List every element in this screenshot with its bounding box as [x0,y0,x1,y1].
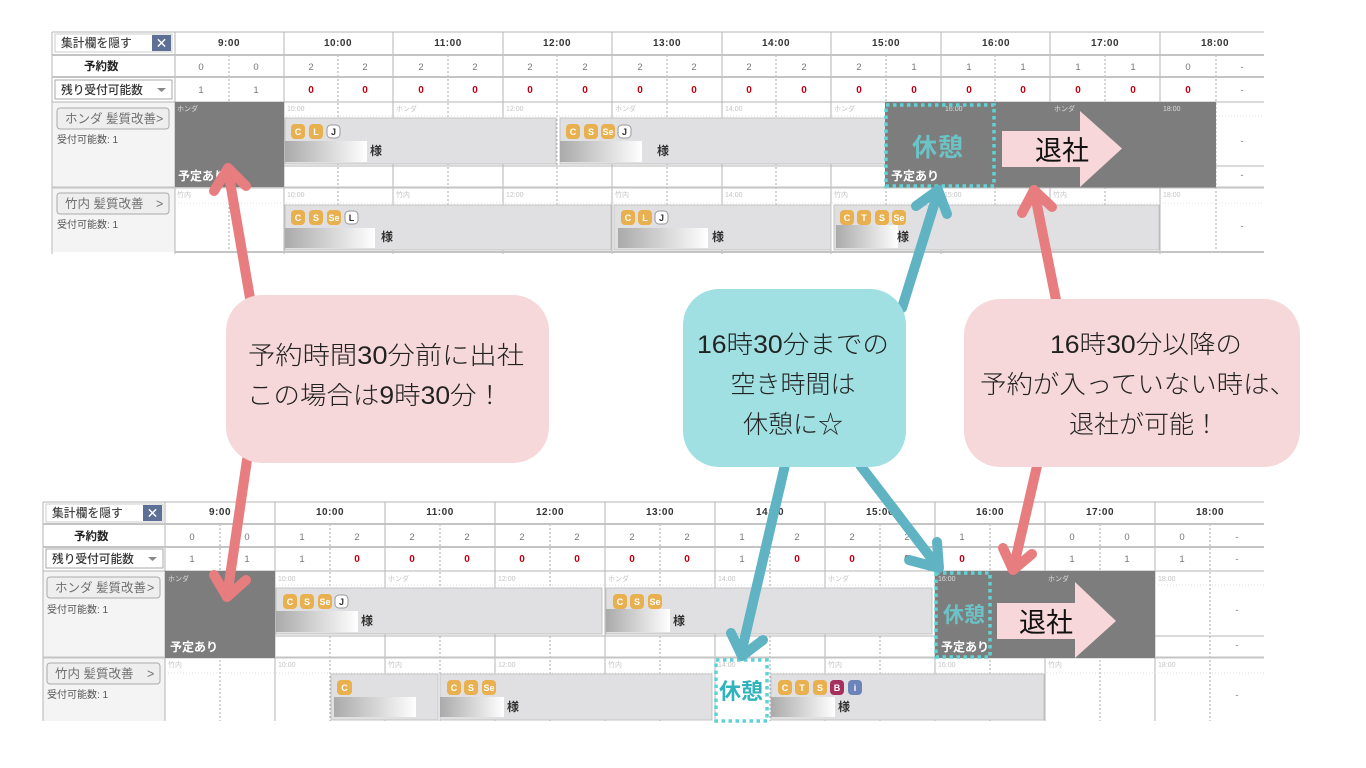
top table: time labels [177,104,1244,232]
top table: Honda reservation 13:00: S [588,127,594,137]
arrow: pink to bottom 9:00 block [214,460,247,597]
top table: remaining availability row: 0 [911,85,917,96]
top table: remaining availability row [55,80,1244,99]
top table: Takeuchi reservation 15:00: S [879,213,885,223]
top table: remaining availability row: - [1240,85,1244,96]
bottom table: hour headers: 16:00 [976,507,1004,518]
bottom table: remaining availability row: 0 [849,554,855,565]
bottom table: staff Honda label: > [147,581,154,595]
bottom table: remaining availability row: 0 [904,554,910,565]
bottom table: staff Takeuchi label: 受付可能数: 1 [47,688,109,701]
bottom table: reservation count row: 2 [574,532,580,543]
bottom table: reservation count row [74,529,1239,543]
bottom table: Takeuchi reservation 10:30: C [341,683,348,693]
bottom table: Honda reservation 10:00: C [287,597,294,607]
top table: Honda reservation 13:00: J [622,127,627,137]
bottom table: hide summary button [46,504,163,522]
callout: may leave if no bookings: 16時30分以降の [1050,331,1242,359]
callout: arrive 30 minutes before: 予約時間30分前に出社 [248,342,524,370]
top table: hour headers: 11:00 [434,38,462,49]
callout: may leave if no bookings [964,299,1300,467]
top table: leave arrow [1002,111,1122,187]
top table: reservation count row: 2 [527,62,533,73]
top table: reservation count row: 1 [1075,62,1081,73]
bottom table: time labels: - [1235,605,1239,616]
top table: remaining availability row: 0 [1020,85,1026,96]
bottom table: reservation count row: 0 [189,532,195,543]
bottom table: hour headers: 14:00 [756,507,784,518]
bottom table: time labels: ホンダ [388,574,409,583]
panel: top schedule table [52,32,1264,254]
top table: time labels: 14:00 [725,106,743,113]
top table: Takeuchi reservation 13:00: 様 [712,229,724,244]
top table: Takeuchi reservation 13:00: C [625,213,632,223]
top table: time labels: 竹内 [177,190,191,199]
bottom table: hour headers: 13:00 [646,507,674,518]
bottom table: staff Honda label: ホンダ 髪質改善 [55,580,146,595]
bottom table: reservation count row: 1 [959,532,965,543]
top table: Takeuchi reservation 10:00: L [349,213,355,223]
top table: time labels: 12:00 [506,106,524,113]
callout: break until 16:30 [683,289,906,467]
top table: remaining availability row: 0 [362,85,368,96]
top table: reservation count row: 1 [911,62,917,73]
top table: Takeuchi reservation 13:00: L [642,213,648,223]
bottom table: reservation count row: - [1235,532,1239,543]
top table: reservation count row: 2 [308,62,314,73]
top table: Honda busy block 16:00 onward: 18:00 [1163,106,1181,113]
bottom table: Honda busy block 9:00: ホンダ [168,574,189,583]
top table: Honda reservation 10:00: C [295,127,302,137]
callout: may leave if no bookings: 予約が入っていない時は、 [980,371,1296,399]
top table: reservation count row: 2 [801,62,807,73]
top table: Takeuchi reservation 13:00 [614,205,831,250]
bottom table: time labels: - [1235,640,1239,651]
bottom table: Honda reservation 13:00: 様 [673,613,685,628]
panel: bottom schedule table [43,502,1264,721]
bottom table: Honda reservation 10:00: J [339,597,344,607]
top table: Honda reservation 13:00: 様 [657,143,669,158]
top table: time labels: - [1240,221,1244,232]
bottom table: time labels [168,574,1239,701]
bottom table: Honda busy block 16:00 onward: 16:00 [938,576,956,583]
bottom table: Honda reservation 10:00: 様 [361,613,373,628]
top table: reservation count row: 2 [582,62,588,73]
bottom table: Takeuchi reservation 14:30: 様 [838,699,850,714]
bottom table: break box 16:00 [936,573,990,657]
bottom table: Takeuchi reservation 10:30 [331,674,438,720]
top table: Takeuchi reservation 10:00: C [295,213,302,223]
top table: remaining availability row: 0 [1075,85,1081,96]
bottom table: time labels: 14:00 [718,576,736,583]
bottom table: reservation count row: 2 [684,532,690,543]
bottom table: reservation count row: 2 [904,532,910,543]
bottom table: reservation count row: 2 [794,532,800,543]
bottom table: reservation count row: 2 [629,532,635,543]
arrow: teal to bottom 14:00 break [731,465,785,656]
bottom table: staff Takeuchi label [47,663,160,701]
arrow: teal to bottom 16:00 break [860,465,939,568]
bottom table: time labels: - [1235,690,1239,701]
top table: time labels: 10:00 [287,106,305,113]
bottom table: reservation count row: 1 [299,532,305,543]
top table: staff Takeuchi label: 竹内 髪質改善 [65,196,143,211]
top table: hour headers: 18:00 [1201,38,1229,49]
bottom table: reservation count row: 2 [354,532,360,543]
bottom table: Honda busy block 16:00 onward [935,571,1155,658]
bottom table: reservation count row: 2 [409,532,415,543]
callout: arrive 30 minutes before: この場合は9時30分！ [247,382,503,410]
top table: remaining availability row: 0 [527,85,533,96]
top table: reservation count row: 2 [418,62,424,73]
bottom table: remaining availability row: 1 [1124,554,1130,565]
top table: remaining availability row: 0 [637,85,643,96]
bottom table: remaining availability row: 1 [299,554,305,565]
top table: reservation count row: 0 [198,62,204,73]
arrow: pink to bottom leave block [1003,466,1037,570]
top table: remaining availability row: 残り受付可能数 [61,83,143,97]
top table: time labels: 18:00 [1163,192,1181,199]
top table: Honda reservation 10:00: 様 [370,143,382,158]
top table: time labels: 12:00 [506,192,524,199]
bottom table: staff Takeuchi label: 竹内 髪質改善 [55,666,133,681]
bottom table: remaining availability row: 0 [794,554,800,565]
bottom table: Honda reservation 13:00 [606,588,932,634]
top table: time labels: 竹内 [396,190,410,199]
bottom table: remaining availability row [46,549,1239,568]
top table: remaining availability row: 0 [308,85,314,96]
top table: reservation count row: 2 [362,62,368,73]
top table: Takeuchi reservation 10:00: S [313,213,319,223]
bottom table: remaining availability row: 1 [739,554,745,565]
top table: hour headers: 10:00 [324,38,352,49]
callout: break until 16:30: 16時30分までの [697,331,889,359]
top table: hour headers: 14:00 [762,38,790,49]
top table: reservation count row: 0 [1185,62,1191,73]
top table: Takeuchi reservation 15:00: C [844,213,851,223]
top table: hour headers: 16:00 [982,38,1010,49]
top table: Honda reservation 10:00: L [313,127,319,137]
bottom table: remaining availability row: 1 [189,554,195,565]
bottom table: leave arrow [997,582,1116,658]
bottom table: Honda busy block 16:00 onward: ホンダ [1048,574,1069,583]
bottom table: remaining availability row: 0 [629,554,635,565]
bottom table: Takeuchi reservation 11:00 [440,674,712,720]
top table: Takeuchi reservation 13:00: J [659,213,664,223]
callout: break until 16:30: 空き時間は [730,371,856,399]
bottom table: leave arrow: 退社 [1019,608,1073,638]
bottom table: remaining availability row: 0 [684,554,690,565]
bottom table: remaining availability row: 0 [574,554,580,565]
top table: leave arrow: 退社 [1035,136,1089,166]
bottom table: hide summary button: ✕ [147,505,158,521]
top table: Honda busy block 9:00: 予定あり [178,169,226,183]
bottom table: remaining availability row: 0 [354,554,360,565]
bottom table: reservation count row: 予約数 [74,529,109,543]
top table: time labels: - [1240,170,1244,181]
bottom table: time labels: 竹内 [168,660,182,669]
top table: hour headers [218,38,1229,49]
top table: remaining availability row: 0 [472,85,478,96]
top table: reservation count row: 1 [966,62,972,73]
bottom table: Takeuchi reservation 11:00: Se [483,683,495,693]
top table: Honda busy block 16:00 onward: 予定あり [891,169,939,183]
bottom table: hour headers: 10:00 [316,507,344,518]
bottom table: remaining availability row: 0 [519,554,525,565]
top table: time labels: 10:00 [287,192,305,199]
top table: time labels: ホンダ [396,104,417,113]
top table: staff Takeuchi label [57,193,169,231]
top table: reservation count row: 2 [691,62,697,73]
top table: staff Takeuchi label: 受付可能数: 1 [57,218,119,231]
bottom table: time labels: 竹内 [388,660,402,669]
bottom table: remaining availability row: 1 [1179,554,1185,565]
top table: Honda busy block 9:00 [175,102,284,187]
top table: hide summary button [55,34,172,52]
bottom table: time labels: 18:00 [1158,662,1176,669]
top table: reservation count row: 1 [1130,62,1136,73]
bottom table: Honda busy block 9:00 [165,571,275,658]
top table: Honda reservation 13:00: C [570,127,577,137]
bottom table: hour headers: 11:00 [426,507,454,518]
bottom table: Honda reservation 13:00: C [617,597,624,607]
bottom table: Honda reservation 10:00 [276,588,602,634]
callout: arrive 30 minutes before [226,295,549,463]
bottom table: remaining availability row: 0 [959,554,965,565]
top table: Takeuchi reservation 15:00: 様 [897,229,909,244]
bottom table: reservation count row: 0 [1069,532,1075,543]
bottom table: remaining availability row: 残り受付可能数 [52,552,134,566]
bottom table: hour headers: 15:00 [866,507,894,518]
top table: Honda reservation 13:00 [560,118,886,164]
bottom table: hour headers [209,507,1224,518]
bottom table: hour headers: 18:00 [1196,507,1224,518]
bottom table: time labels: 竹内 [828,660,842,669]
bottom table: reservation count row: 1 [739,532,745,543]
top table: Honda busy block 9:00: ホンダ [177,104,198,113]
top table: reservation count row: 2 [746,62,752,73]
top table: Takeuchi reservation 15:00: Se [893,213,905,223]
bottom table: Honda reservation 13:00: Se [649,597,661,607]
bottom table: Takeuchi reservation 14:30: i [854,683,856,693]
top table: time labels: 15:00 [944,192,962,199]
bottom table: hour headers: 12:00 [536,507,564,518]
bottom table: reservation count row: 0 [244,532,250,543]
bottom table: remaining availability row: - [1235,554,1239,565]
top table: reservation count row [84,59,1244,73]
top table: remaining availability row: 1 [253,85,259,96]
top table: remaining availability row: 0 [856,85,862,96]
top table: hour headers: 13:00 [653,38,681,49]
top table: time labels: - [1240,136,1244,147]
bottom table: time labels: 16:00 [938,662,956,669]
arrow: teal to top break box [902,190,947,308]
bottom table: Takeuchi reservation 14:30 [771,674,1044,720]
top table: staff Honda label: ホンダ 髪質改善 [65,111,156,126]
bottom table: Takeuchi reservation 14:30: C [782,683,789,693]
top table: time labels: ホンダ [834,104,855,113]
bottom table: time labels: ホンダ [608,574,629,583]
callout: break until 16:30: 休憩に☆ [743,411,843,439]
top table: hour headers: 15:00 [872,38,900,49]
top table: remaining availability row: 0 [582,85,588,96]
bottom table: remaining availability row: 1 [1069,554,1075,565]
top table: Takeuchi reservation 10:00: 様 [381,229,393,244]
bottom table: time labels: 竹内 [608,660,622,669]
top table: time labels: 14:00 [725,192,743,199]
bottom table: remaining availability row: 0 [409,554,415,565]
top table: Takeuchi reservation 15:00 [834,205,1159,250]
top table: reservation count row: 2 [856,62,862,73]
bottom table: Honda busy block 9:00: 予定あり [170,640,218,654]
bottom table: Takeuchi reservation 11:00: C [451,683,458,693]
top table: staff Honda label: > [156,112,163,126]
bottom table: remaining availability row: 0 [464,554,470,565]
bottom table: Takeuchi reservation 14:30: S [817,683,823,693]
bottom table: time labels: 10:00 [278,576,296,583]
bottom table: time labels: ホンダ [828,574,849,583]
top table: time labels: 竹内 [1053,190,1067,199]
top table: Takeuchi reservation 15:00: T [861,213,867,223]
top table: Honda reservation 10:00 [285,118,556,164]
bottom table: reservation count row: 0 [1124,532,1130,543]
bottom table: break box 14:00: 休憩 [719,679,763,704]
callout: may leave if no bookings: 退社が可能！ [1069,411,1219,439]
bottom table: Takeuchi reservation 14:30: B [834,683,841,693]
bottom table: remaining availability row: 1 [244,554,250,565]
top table: Honda busy block 16:00 onward [885,102,1216,188]
top table: Takeuchi reservation 10:00 [285,205,611,250]
bottom table: Takeuchi reservation 14:30: T [799,683,805,693]
bottom table: hour headers: 9:00 [209,507,231,518]
bottom table: hour headers: 17:00 [1086,507,1114,518]
top table: Takeuchi reservation 10:00: Se [328,213,340,223]
top table: remaining availability row: 0 [966,85,972,96]
top table: Honda busy block 16:00 onward: ホンダ [1054,104,1075,113]
top table: break box [886,105,994,186]
top table: hour headers: 17:00 [1091,38,1119,49]
top table: staff Honda label [57,108,169,146]
bottom table: time labels: 12:00 [498,662,516,669]
top table: Honda busy block 16:00 onward: 16:00 [945,106,963,113]
top table: remaining availability row: 1 [198,85,204,96]
bottom table: reservation count row: 2 [849,532,855,543]
bottom table: Honda reservation 10:00: Se [319,597,331,607]
top table: reservation count row: 2 [637,62,643,73]
top table: break box: 休憩 [912,134,964,162]
top table: staff Honda label: 受付可能数: 1 [57,133,119,146]
bottom table: break box 16:00: 休憩 [943,604,985,627]
top table: hour headers: 12:00 [543,38,571,49]
bottom table: break box 14:00 [716,660,767,721]
top table: reservation count row: 予約数 [84,59,119,73]
top table: hide summary button: ✕ [156,35,167,51]
top table: time labels: ホンダ [615,104,636,113]
arrow: pink to top leave block [1022,190,1056,300]
bottom table: reservation count row: 2 [519,532,525,543]
bottom table: staff Honda label [47,577,160,616]
bottom table: staff Honda label: 受付可能数: 1 [47,603,109,616]
top table: hide summary button: 集計欄を隠す [61,36,132,50]
arrow: pink to top 9:00 block [214,168,250,298]
top table: Honda reservation 10:00: J [331,127,336,137]
bottom table: time labels: 10:00 [278,662,296,669]
bottom table: staff Takeuchi label: > [147,667,154,681]
top table: Honda reservation 13:00: Se [602,127,614,137]
bottom table: Honda reservation 13:00: S [634,597,640,607]
top table: remaining availability row: 0 [1185,85,1191,96]
bottom table: Honda reservation 10:00: S [304,597,310,607]
top table: reservation count row: 1 [1020,62,1026,73]
bottom table: time labels: 18:00 [1158,576,1176,583]
bottom table: time labels: 竹内 [1048,660,1062,669]
top table: reservation count row: 2 [472,62,478,73]
top table: remaining availability row: 0 [418,85,424,96]
top table: remaining availability row: 0 [746,85,752,96]
bottom table: reservation count row: 0 [1179,532,1185,543]
bottom table: Takeuchi reservation 11:00: 様 [507,699,519,714]
bottom table: Takeuchi reservation 11:00: S [468,683,474,693]
top table: time labels: 竹内 [834,190,848,199]
top table: remaining availability row: 0 [801,85,807,96]
bottom table: Honda busy block 16:00 onward: 予定あり [941,640,989,654]
top table: staff Takeuchi label: > [156,197,163,211]
top table: hour headers: 9:00 [218,38,240,49]
bottom table: time labels: 12:00 [498,576,516,583]
top table: time labels: 竹内 [615,190,629,199]
bottom table: reservation count row: 2 [464,532,470,543]
bottom table: hide summary button: 集計欄を隠す [52,506,123,520]
top table: remaining availability row: 0 [1130,85,1136,96]
top table: remaining availability row: 0 [691,85,697,96]
top table: reservation count row: 0 [253,62,259,73]
bottom table: break box 14:00: 14:00 [718,662,736,669]
top table: reservation count row: - [1240,62,1244,73]
